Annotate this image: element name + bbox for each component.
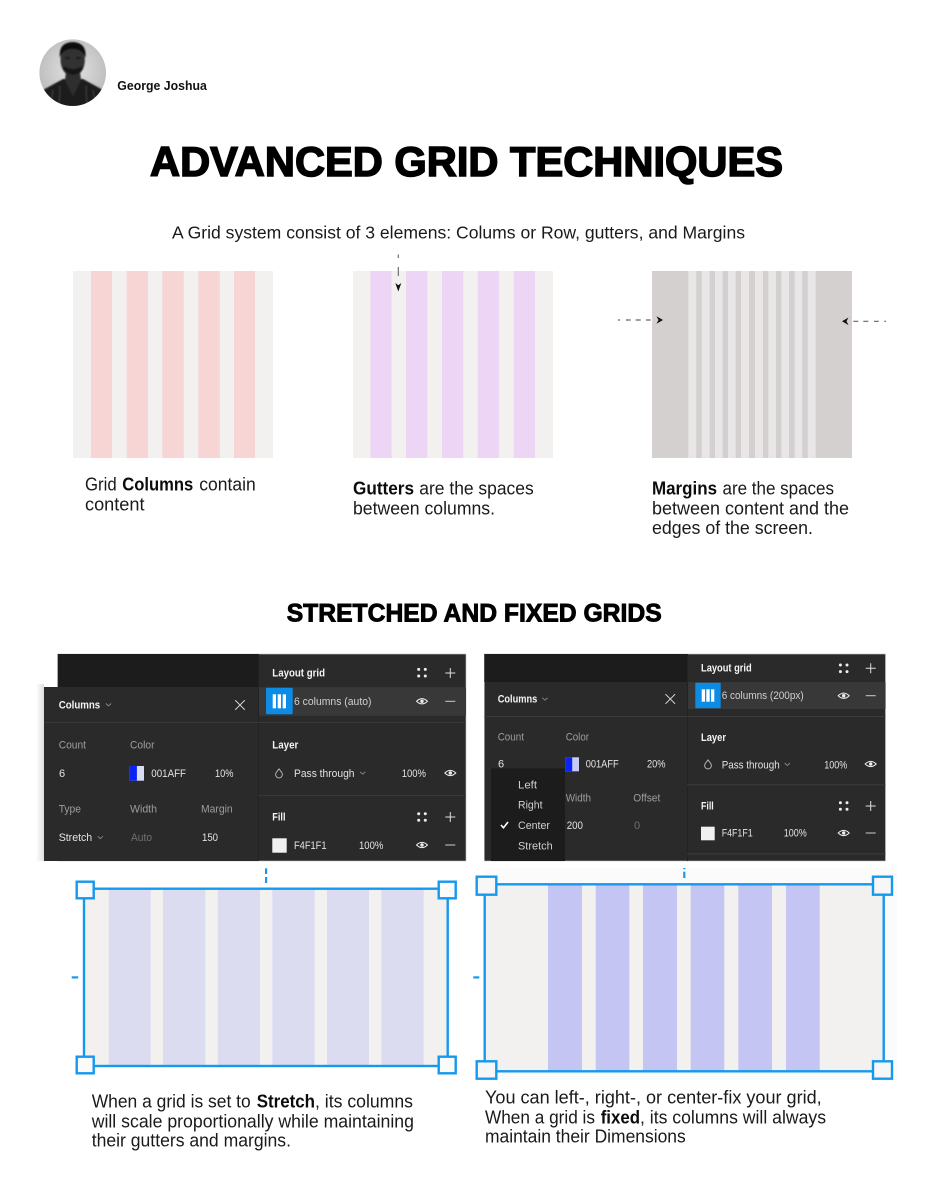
dropdown: alignment menu: Stretch — [518, 840, 553, 852]
panel: columns grid — [73, 271, 273, 458]
icon: active grid — [695, 683, 721, 708]
panel: stretch settings UI: Margin — [201, 804, 233, 816]
caption: fixed: maintain their Dimensions — [485, 1127, 686, 1147]
caption: columns — [85, 475, 256, 514]
caption: gutters: Gutters — [353, 478, 414, 498]
panel: stretch settings UI: Fill — [272, 812, 286, 824]
panel: stretch settings UI: 150 — [202, 832, 218, 844]
panel: stretch settings UI: Type — [59, 804, 81, 816]
panel: fixed settings UI: F4F1F1 — [722, 828, 753, 840]
panel: fixed settings UI: 0 — [634, 820, 640, 832]
panel: stretch settings UI — [36, 654, 466, 861]
author name: George Joshua — [117, 79, 208, 93]
arrow: left margin pointer — [618, 316, 663, 324]
panel: gutters grid — [353, 271, 553, 458]
caption: fixed: fixed — [601, 1107, 640, 1127]
panel: fixed settings UI: Count — [498, 732, 524, 744]
caption: margins — [652, 478, 849, 538]
caption: margins: Margins — [652, 478, 717, 498]
caption: gutters: are the spaces — [419, 478, 534, 498]
panel: stretch settings UI: Layout grid — [272, 668, 325, 680]
caption: fixed: When a grid is — [485, 1107, 595, 1127]
section heading: STRETCHED AND FIXED GRIDS — [287, 600, 662, 628]
arrow: gutter pointer — [395, 254, 401, 292]
panel: stretch settings UI: Width — [130, 804, 157, 816]
panel: fixed settings UI — [484, 654, 886, 861]
arrow: right margin pointer — [842, 318, 886, 325]
panel: stretch settings UI: Auto — [131, 832, 152, 844]
panel: fixed settings UI: Layout grid — [701, 663, 752, 675]
caption: stretch: , its columns — [315, 1091, 413, 1111]
caption: gutters — [353, 478, 534, 518]
caption: fixed — [485, 1087, 826, 1147]
caption: fixed: , its columns will always — [640, 1107, 826, 1127]
panel: stretch settings UI: 001AFF — [151, 768, 186, 780]
panel: stretch settings UI: Pass through — [294, 768, 354, 780]
diagram: fixed grid — [473, 868, 897, 1080]
author avatar — [39, 39, 107, 107]
caption: columns: Columns — [122, 475, 193, 495]
title: ADVANCED GRID TECHNIQUES — [150, 138, 783, 185]
caption: columns: Grid — [85, 475, 117, 495]
panel: fixed settings UI: 001AFF — [586, 759, 619, 771]
panel: fixed settings UI: 6 — [498, 759, 504, 771]
dropdown: alignment menu: Center — [518, 820, 550, 832]
dropdown: alignment menu — [491, 768, 565, 861]
diagram: stretched grid — [72, 868, 456, 1073]
panel: stretch settings UI: 10% — [215, 768, 234, 780]
panel: fixed settings UI: 100% — [824, 759, 847, 771]
panel: stretch settings UI: 100% — [402, 768, 426, 780]
panel: stretch settings UI: 6 — [59, 768, 65, 780]
caption: margins: are the spaces — [722, 478, 834, 498]
panel: margins grid — [652, 271, 852, 458]
caption: stretch: will scale proportionally while maintaining — [91, 1111, 414, 1131]
panel: fixed settings UI: 200 — [567, 820, 583, 832]
icon: active grid — [266, 688, 293, 714]
panel: fixed settings UI: 20% — [647, 759, 666, 771]
caption: stretch: When a grid is set to — [92, 1091, 251, 1111]
panel: stretch settings UI: 6 columns (auto) — [294, 696, 372, 708]
swatch: column colour 20% — [565, 757, 579, 771]
subtitle: A Grid system consist of 3 elemens: Colums or Row, gutters, and Margins — [172, 222, 745, 242]
panel: fixed settings UI: Layer — [701, 732, 727, 744]
panel: stretch settings UI: Color — [130, 739, 155, 751]
swatch: column colour 10% — [130, 766, 144, 781]
panel: fixed settings UI: Pass through — [722, 759, 780, 771]
dropdown: alignment menu: Right — [518, 800, 542, 812]
panel: fixed settings UI: 100% — [784, 828, 807, 840]
caption: fixed: You can left-, right-, or center-fix your grid, — [485, 1087, 822, 1107]
caption: stretch: their gutters and margins. — [92, 1131, 291, 1151]
panel: stretch settings UI: Count — [59, 739, 86, 751]
panel: fixed settings UI: Fill — [701, 801, 714, 813]
panel: stretch settings UI: Layer — [272, 740, 299, 752]
panel: stretch settings UI: Stretch — [59, 832, 92, 844]
panel: fixed settings UI: Width — [566, 793, 591, 805]
caption: gutters: between columns. — [353, 498, 495, 518]
caption: columns: content — [85, 494, 144, 514]
panel: stretch settings UI: 100% — [359, 840, 383, 852]
caption: stretch: Stretch — [257, 1091, 315, 1111]
panel: fixed settings UI: Offset — [633, 793, 660, 805]
dropdown: alignment menu: Left — [518, 779, 537, 791]
caption: columns: contain — [199, 475, 256, 495]
panel: fixed settings UI: Columns — [498, 693, 537, 705]
panel: fixed settings UI: 6 columns (200px) — [722, 690, 804, 702]
caption: margins: between content and the — [652, 498, 849, 518]
panel: stretch settings UI: F4F1F1 — [294, 840, 326, 852]
caption: margins: edges of the screen. — [652, 518, 813, 538]
caption: stretch — [91, 1091, 414, 1151]
panel: fixed settings UI: Color — [566, 732, 589, 744]
panel: stretch settings UI: Columns — [59, 699, 100, 711]
